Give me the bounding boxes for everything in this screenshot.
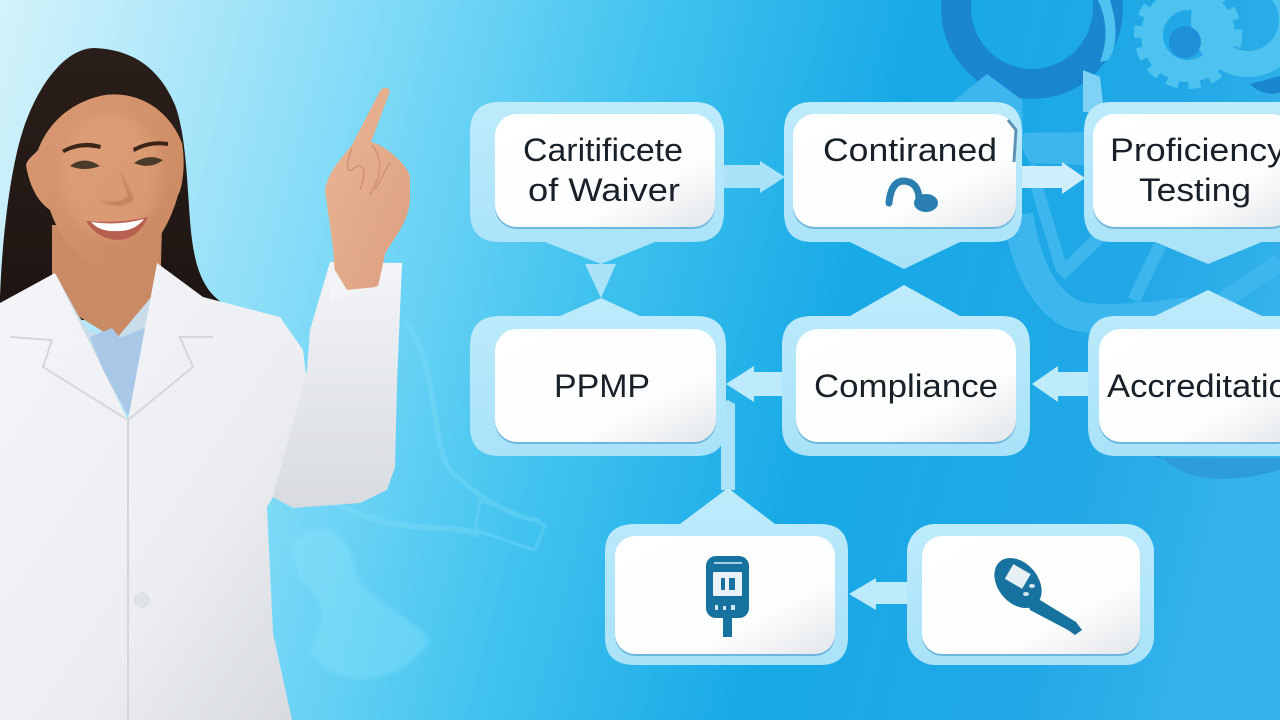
eyebrows (62, 141, 168, 153)
coat sleeve (273, 262, 402, 508)
card: Accreditation (1088, 290, 1280, 456)
helix strands (950, 74, 1084, 165)
shirt collar (90, 327, 147, 415)
eyes (70, 157, 163, 169)
background decoration: gears and helix (290, 0, 1280, 679)
card: Continued (784, 102, 1022, 269)
faint ghost shapes lower left (330, 320, 545, 550)
card: Certificate of Waiver: of Waiver (528, 172, 680, 208)
arrow: continued to proficiency (1022, 162, 1085, 194)
sleeve cuff (330, 262, 402, 302)
card: Certificate of Waiver (470, 102, 724, 264)
hair (0, 48, 230, 320)
person: lab coat professional (0, 48, 410, 720)
small light gear (1138, 0, 1280, 85)
card: lancet device (907, 524, 1154, 665)
hand with wrist (325, 88, 410, 290)
finger creases (348, 145, 390, 195)
card: Compliance: Compliance (814, 368, 998, 404)
arrow: certificate down to PPMP (585, 264, 616, 298)
coat lapel lines (10, 337, 213, 720)
arrow: accreditation to compliance (1032, 366, 1088, 402)
arrow: right device to left device (849, 578, 907, 610)
face (26, 94, 184, 270)
face highlight (60, 113, 160, 237)
large dark gear (956, 0, 1108, 84)
icon: glucose meter (706, 556, 749, 637)
icon: curved tube (889, 181, 938, 212)
flow arrows (585, 161, 1088, 610)
card: Proficiency Testing: Testing (1139, 172, 1251, 208)
card: glucose meter (605, 488, 848, 665)
smile (86, 217, 148, 240)
neck (52, 225, 162, 345)
shirt (55, 273, 157, 415)
card: Proficiency Testing: Proficiency (1110, 132, 1280, 168)
coat body (0, 263, 306, 720)
card: Continued: Contiraned (823, 132, 997, 168)
card: Certificate of Waiver: Caritificete (523, 132, 683, 168)
card: Proficiency Testing (1084, 102, 1280, 264)
card: Compliance (782, 285, 1030, 456)
coat button (134, 592, 150, 608)
arrow: compliance to PPMP (726, 366, 782, 402)
card: PPMP (470, 298, 726, 456)
arrow: certificate to continued (724, 161, 785, 193)
card: PPMP: PPMP (554, 368, 650, 404)
nose shadow (100, 170, 134, 206)
arrow: device to PPMP (721, 400, 735, 490)
icon: handheld device (985, 549, 1082, 635)
